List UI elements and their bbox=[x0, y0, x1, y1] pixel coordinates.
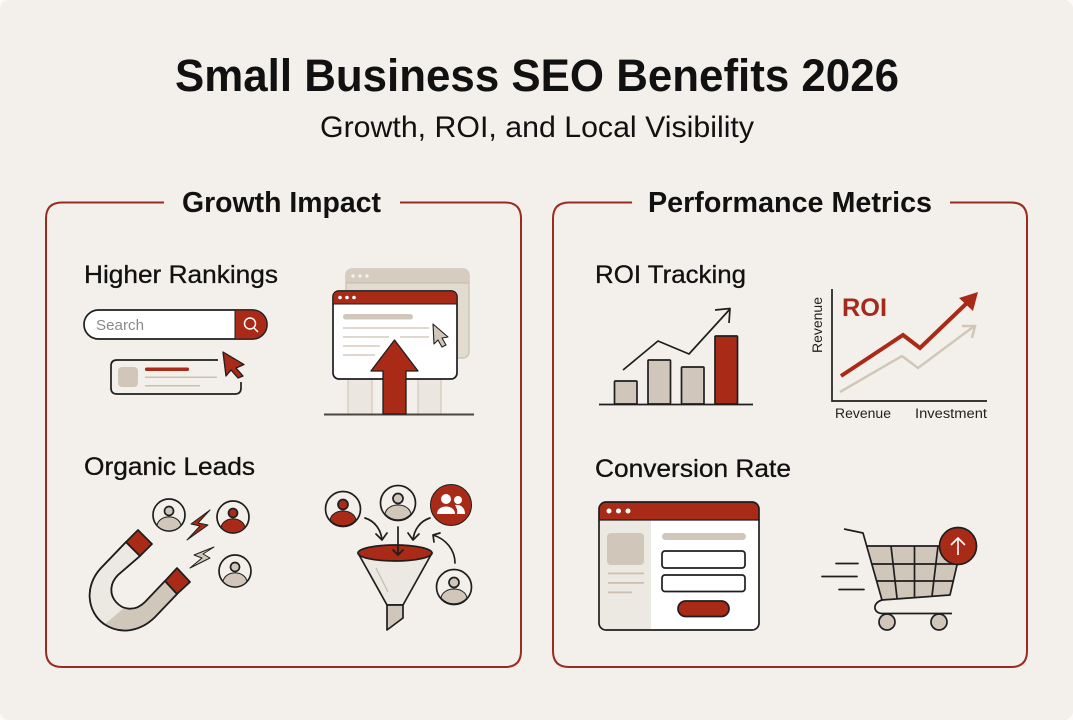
icon: magnet attracting leads bbox=[90, 499, 251, 630]
icon: lead funnel bbox=[326, 484, 472, 630]
icon: search bar bbox=[84, 310, 267, 339]
panel border bbox=[46, 202, 521, 667]
icon: search result card bbox=[111, 360, 241, 394]
icon: browser windows with rising arrow bbox=[324, 269, 474, 414]
panel: performance metrics bbox=[553, 187, 1027, 667]
sub-heading: roi tracking: ROI Tracking bbox=[595, 261, 746, 289]
line chart: roi: Investment bbox=[915, 406, 987, 421]
panel border bbox=[553, 202, 1027, 667]
icon: search bar: Search bbox=[96, 318, 144, 334]
bar chart with trend arrow bbox=[599, 308, 753, 404]
panel heading: Growth Impact bbox=[182, 187, 381, 219]
panel heading: Performance Metrics bbox=[648, 187, 932, 219]
sub-heading: conversion rate: Conversion Rate bbox=[595, 455, 791, 483]
title: Small Business SEO Benefits 2026 bbox=[175, 50, 899, 101]
icon: landing page form bbox=[599, 502, 759, 630]
line chart: roi: Revenue bbox=[810, 297, 825, 353]
line chart: roi bbox=[810, 289, 987, 421]
icon: shopping cart with up arrow bbox=[822, 528, 976, 630]
sub-heading: organic leads: Organic Leads bbox=[84, 453, 255, 481]
panel: growth impact bbox=[46, 187, 521, 667]
sub-heading: higher rankings: Higher Rankings bbox=[84, 261, 278, 289]
line chart: roi: Revenue bbox=[835, 406, 891, 421]
subtitle: Growth, ROI, and Local Visibility bbox=[320, 111, 754, 144]
icon: red cursor bbox=[223, 352, 244, 378]
roi label: ROI bbox=[842, 294, 887, 322]
